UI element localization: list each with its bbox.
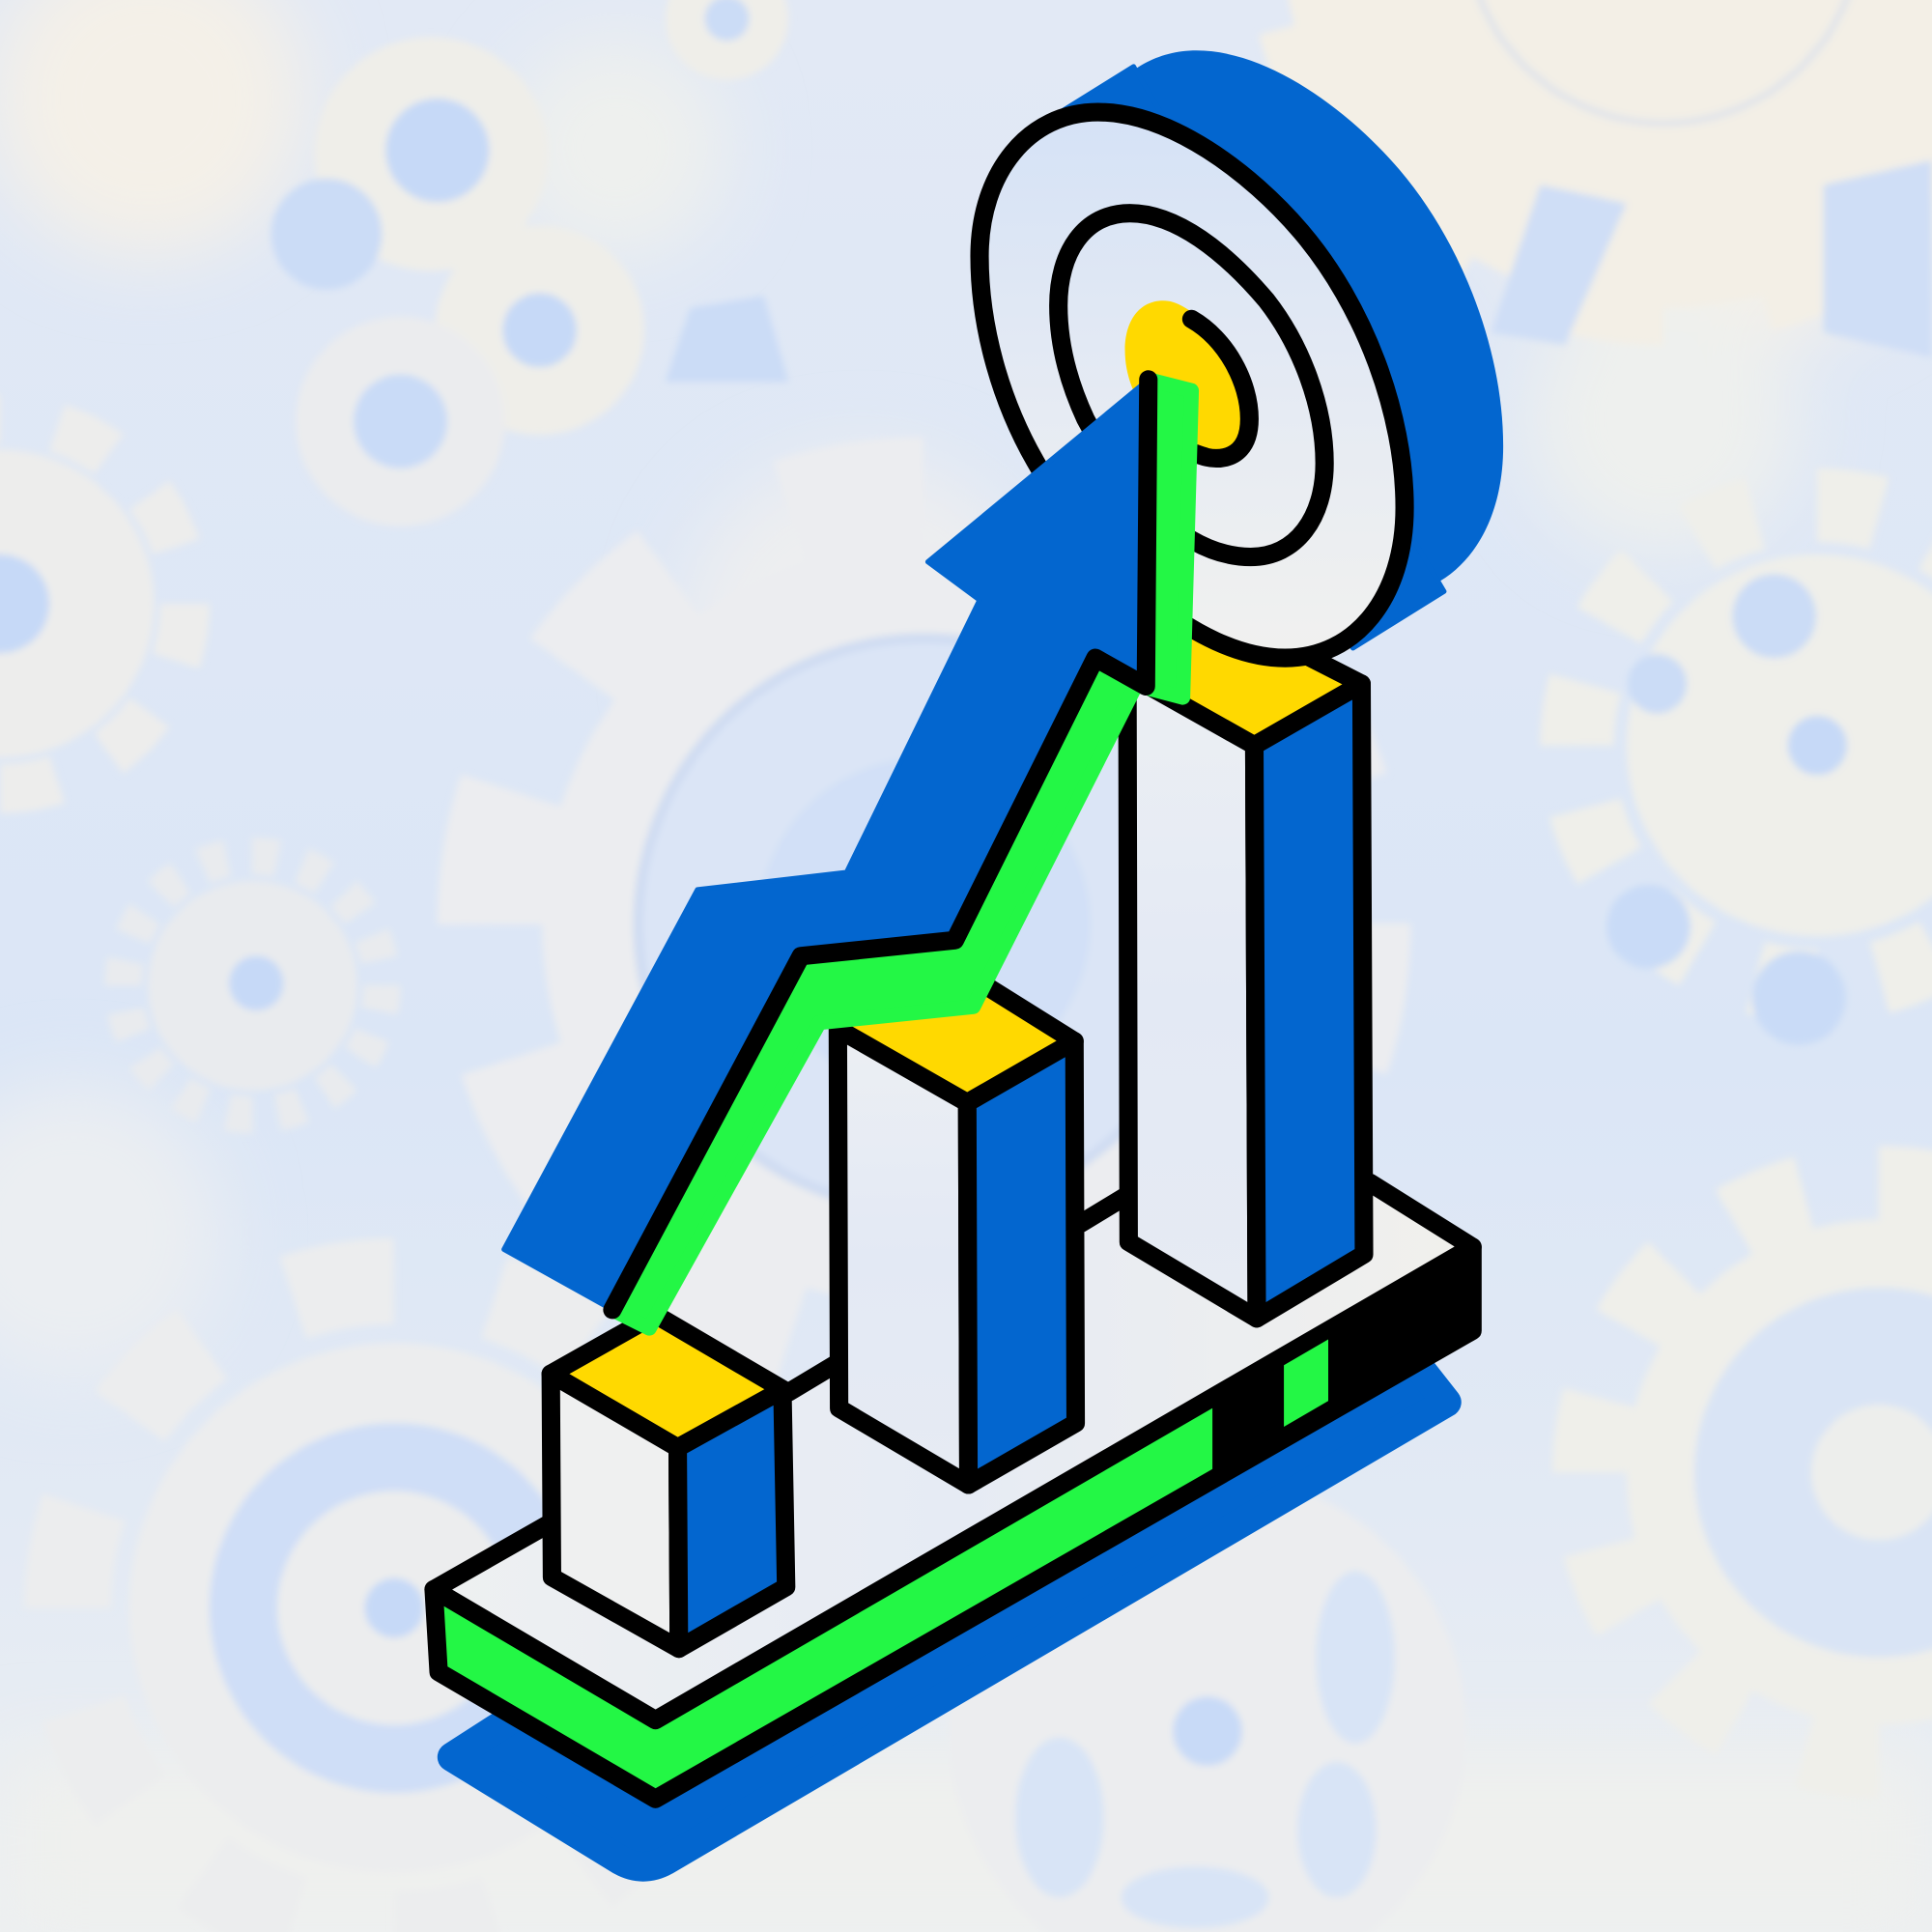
platform status window [1284,1339,1328,1427]
left gears [0,450,154,757]
platform shadow [452,1350,1446,1866]
target back side [1048,50,1503,648]
bar 2 (medium) [838,970,1076,1485]
rising arrow [504,380,1191,1328]
right-mid gears [1627,554,1932,936]
left-bottom gear [129,1343,659,1873]
bottom-center gear [949,1472,1466,1932]
platform front faces [434,1247,1472,1799]
bar 3 (tall) [1127,610,1364,1319]
target outer ring [980,112,1405,658]
bar 1 (short) [551,1315,786,1649]
target middle ring [1059,213,1324,557]
platform top face [434,1115,1472,1720]
top-right gear [1282,0,1932,308]
arrow green side [612,380,1191,1328]
center gear [542,542,1306,1306]
target [980,50,1503,658]
arrow blue face [504,380,1149,1310]
right-bottom gear [1627,1220,1932,1725]
top-left gears [314,37,549,271]
platform black segment [1216,1247,1472,1479]
platform [434,1115,1472,1799]
target bullseye [1125,300,1249,458]
target bullseye outline [1191,319,1249,458]
arrow outline [612,380,1149,1310]
